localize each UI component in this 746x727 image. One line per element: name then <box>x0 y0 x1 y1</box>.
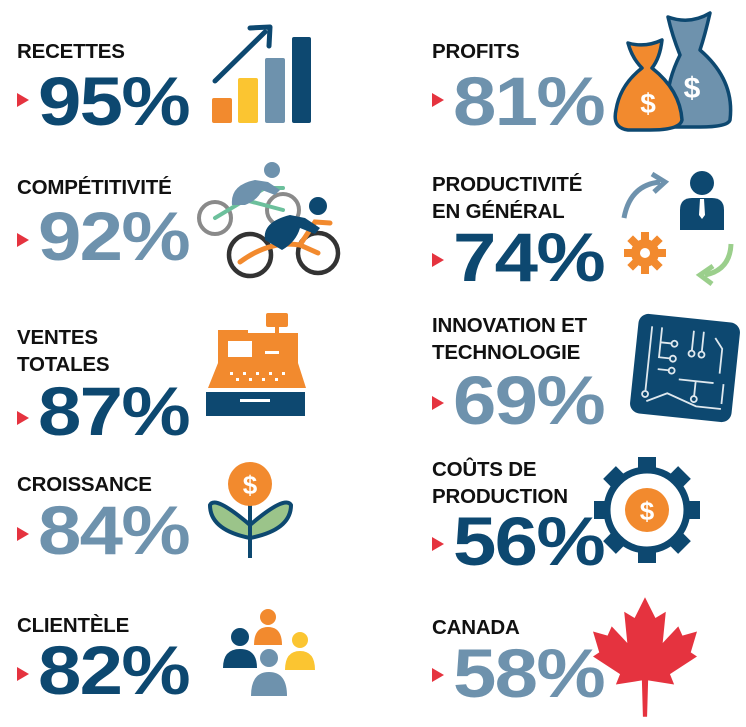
icon: plant with coin <box>208 462 293 558</box>
item: profits <box>432 40 604 140</box>
icon: money bags <box>613 11 732 132</box>
item: recettes <box>17 40 189 140</box>
arrow marker <box>17 667 29 681</box>
label: competitivite: COMPÉTITIVITÉ <box>17 176 172 199</box>
arrow marker <box>17 527 29 541</box>
icon: maple leaf <box>593 597 697 717</box>
label: ventes totales: TOTALES <box>17 353 109 376</box>
number 74%: 74% <box>453 219 604 296</box>
icon: gear with coin: $ <box>640 496 655 526</box>
label: couts de production: PRODUCTION <box>432 485 568 508</box>
label: ventes totales: VENTES <box>17 326 98 349</box>
number 56%: 56% <box>453 503 604 580</box>
number 84%: 84% <box>38 492 189 569</box>
label: couts de production: COÛTS DE <box>432 458 536 481</box>
label: productivite en general <box>432 173 582 223</box>
label: canada: CANADA <box>432 616 520 639</box>
arrow marker <box>432 396 444 410</box>
label: innovation et technologie: INNOVATION ET <box>432 314 587 337</box>
icon: productivity cycle <box>622 171 734 286</box>
icon: money bags: $ <box>684 72 701 105</box>
number 81%: 81% <box>453 63 604 140</box>
item: competitivite <box>17 176 189 275</box>
item: innovation <box>432 314 604 439</box>
label: ventes totales <box>17 326 109 376</box>
label: couts de production <box>432 458 568 508</box>
label: productivite en general: PRODUCTIVITÉ <box>432 173 582 196</box>
label: croissance: CROISSANCE <box>17 473 152 496</box>
label: profits: PROFITS <box>432 40 519 63</box>
item: clientele <box>17 614 189 709</box>
icon: bicycles <box>197 162 340 278</box>
label: productivite en general: EN GÉNÉRAL <box>432 200 564 223</box>
label: innovation et technologie <box>432 314 587 364</box>
icon: people <box>223 609 315 696</box>
item: croissance <box>17 473 189 569</box>
icon: money bags: $ <box>640 88 656 119</box>
icon: plant with coin: $ <box>243 470 258 500</box>
number 92%: 92% <box>38 198 189 275</box>
icon: cash register <box>206 313 306 416</box>
number 95%: 95% <box>38 63 189 140</box>
item: productivite <box>432 173 604 296</box>
arrow marker <box>432 668 444 682</box>
item: ventes totales <box>17 326 189 450</box>
icon: gear with coin <box>594 457 700 563</box>
number 69%: 69% <box>453 362 604 439</box>
item: couts de production <box>432 458 604 580</box>
arrow marker <box>432 537 444 551</box>
number 87%: 87% <box>38 373 189 450</box>
icon: circuit board <box>630 314 740 422</box>
icon: bar chart <box>212 24 311 123</box>
label: innovation et technologie: TECHNOLOGIE <box>432 341 580 364</box>
item: canada <box>432 616 604 712</box>
arrow marker <box>17 233 29 247</box>
label: recettes: RECETTES <box>17 40 125 63</box>
arrow marker <box>17 411 29 425</box>
arrow marker <box>17 93 29 107</box>
arrow marker <box>432 253 444 267</box>
label: clientele: CLIENTÈLE <box>17 614 129 637</box>
number 58%: 58% <box>453 635 604 712</box>
arrow marker <box>432 93 444 107</box>
number 82%: 82% <box>38 632 189 709</box>
